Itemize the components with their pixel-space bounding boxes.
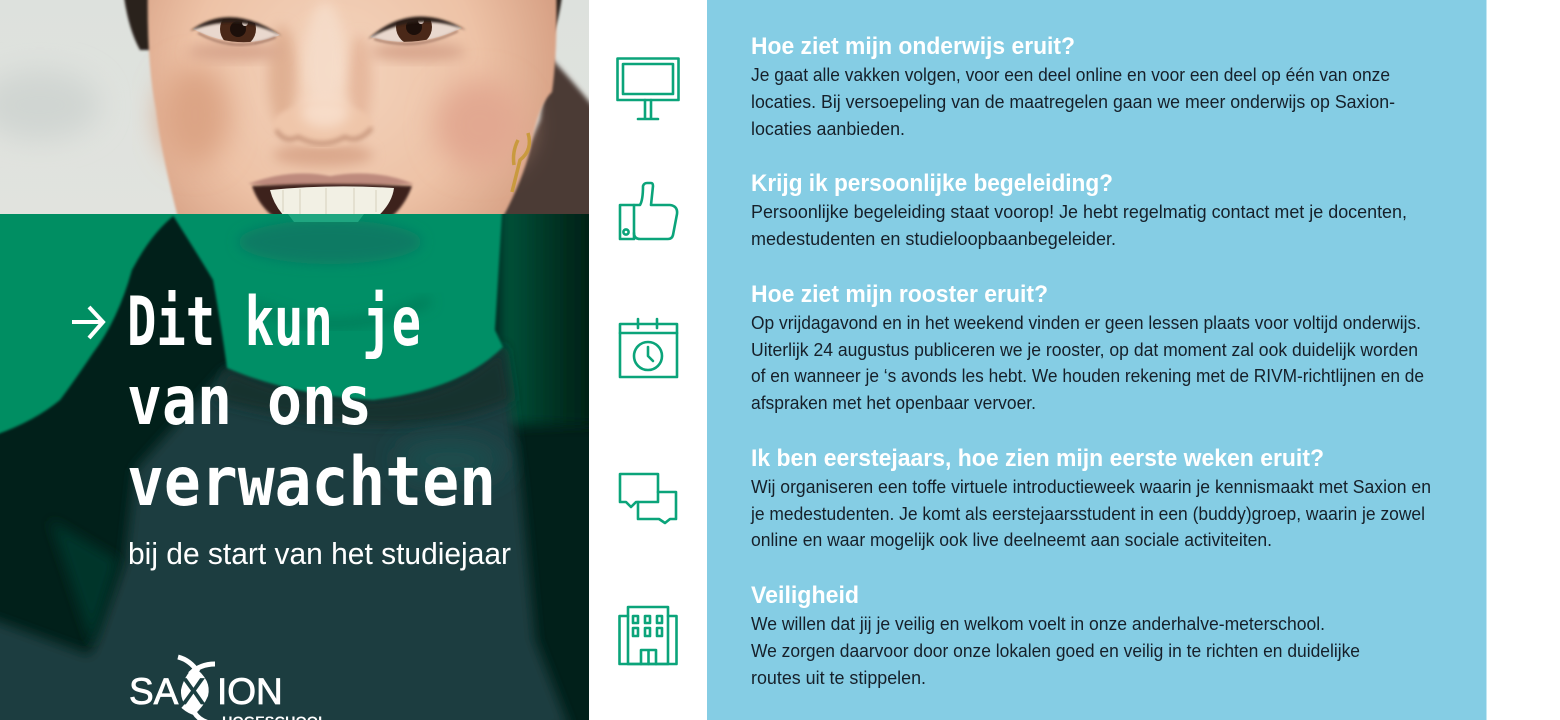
section: veiligheid: Veiligheid bbox=[751, 582, 859, 609]
section: rooster: of en wanneer je ‘s avonds les hebt. We houden rekening met de RIVM-richtlijnen en de bbox=[751, 365, 1424, 386]
section: eerste weken: online en waar mogelijk ook live deelneemt aan sociale activiteiten. bbox=[751, 529, 1272, 550]
section: begeleiding: medestudenten en studieloopbaanbegeleider. bbox=[751, 228, 1116, 249]
section: onderwijs: locaties. Bij versoepeling van de maatregelen gaan we meer onderwijs op Saxion- bbox=[751, 91, 1395, 112]
section: onderwijs: locaties aanbieden. bbox=[751, 118, 905, 139]
icon: monitor bbox=[618, 58, 678, 119]
section: onderwijs: Je gaat alle vakken volgen, voor een deel online en voor een deel op één van onze bbox=[751, 64, 1390, 85]
title bbox=[127, 283, 496, 522]
section: begeleiding: Krijg ik persoonlijke begeleiding? bbox=[751, 170, 1113, 197]
section: veiligheid: We willen dat jij je veilig en welkom voelt in onze anderhalve-meterschool. bbox=[751, 613, 1325, 634]
section: onderwijs: Hoe ziet mijn onderwijs eruit? bbox=[751, 33, 1075, 60]
hair strands bbox=[54, 526, 116, 634]
section: onderwijs bbox=[751, 33, 1395, 139]
section: rooster bbox=[751, 281, 1424, 413]
neck and chin bbox=[172, 214, 504, 402]
under-eye shading bbox=[187, 43, 283, 61]
section: begeleiding: Persoonlijke begeleiding staat voorop! Je hebt regelmatig contact met je docenten, bbox=[751, 201, 1407, 222]
panel: information bbox=[707, 0, 1486, 720]
title: verwachten bbox=[127, 443, 496, 522]
section: eerste weken bbox=[750, 445, 1431, 550]
logo: Saxion Hogeschool: X bbox=[181, 671, 206, 712]
section: veiligheid bbox=[751, 582, 1360, 688]
photo: natural upper part bbox=[0, 0, 589, 214]
section: eerste weken: Wij organiseren een toffe virtuele introductieweek waarin je kennismaakt met Saxion en bbox=[751, 476, 1431, 497]
photo: smiling student with green overlay bbox=[0, 0, 610, 720]
subtitle: bij de start van het studiejaar bbox=[128, 536, 511, 571]
arrow bbox=[72, 307, 103, 338]
title: van ons bbox=[127, 362, 372, 441]
section: rooster: afspraken met het openbaar vervoer. bbox=[751, 392, 1036, 413]
icon: building bbox=[620, 607, 676, 664]
mouth bbox=[249, 172, 413, 186]
logo: Saxion Hogeschool: SA bbox=[129, 671, 179, 712]
icon: speech bubbles bbox=[620, 474, 676, 523]
sweater bbox=[0, 345, 570, 720]
eye right bbox=[368, 14, 466, 46]
section: begeleiding bbox=[751, 170, 1407, 249]
icon: thumbs up bbox=[620, 183, 677, 239]
section: eerste weken: je medestudenten. Je komt als eerstejaarsstudent in een (buddy)groep, waarin je zowel bbox=[750, 503, 1425, 524]
section: veiligheid: We zorgen daarvoor door onze lokalen goed en veilig in te richten en duidelijke bbox=[751, 640, 1360, 661]
title: Dit kun je bbox=[127, 283, 421, 362]
section: rooster: Op vrijdagavond en in het weekend vinden er geen lessen plaats voor voltijd onderwijs. bbox=[751, 312, 1421, 333]
earring bbox=[512, 133, 529, 192]
section: rooster: Hoe ziet mijn rooster eruit? bbox=[751, 281, 1048, 308]
logo: Saxion Hogeschool: ION bbox=[217, 671, 283, 712]
eye left bbox=[190, 15, 282, 47]
green background bbox=[0, 214, 174, 435]
section: rooster: Uiterlijk 24 augustus publiceren we je rooster, op dat moment zal ook duidelijk worden bbox=[751, 339, 1418, 360]
section: eerste weken: Ik ben eerstejaars, hoe zien mijn eerste weken eruit? bbox=[751, 445, 1324, 472]
icon: calendar with clock bbox=[620, 319, 677, 377]
logo: Saxion Hogeschool bbox=[129, 657, 327, 720]
photo: green-toned lower part bbox=[0, 190, 610, 720]
section: veiligheid: routes uit te stippelen. bbox=[751, 667, 926, 688]
